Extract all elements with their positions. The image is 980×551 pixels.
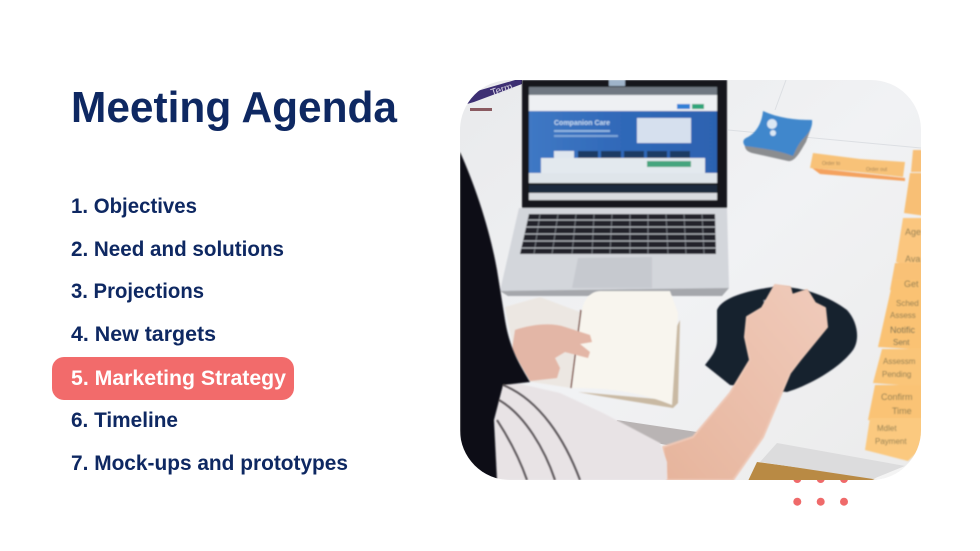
purple sticker: Term <box>490 82 514 99</box>
mouse pad <box>705 287 857 392</box>
slide canvas <box>52 80 921 506</box>
agenda item 3: 3. Projections <box>71 280 204 303</box>
vertical sticky notes column: Ava <box>905 254 920 264</box>
highlighted agenda item 5: 5. Marketing Strategy <box>71 367 286 390</box>
laptop <box>500 80 729 296</box>
photo: person working at a desk with laptop <box>460 78 925 481</box>
person's dark hair <box>460 152 580 480</box>
laptop base <box>500 208 729 296</box>
agenda item 1: 1. Objectives <box>71 195 197 218</box>
vertical sticky notes column: Pending <box>882 370 911 379</box>
keyboard <box>520 214 716 254</box>
trackpad <box>572 257 652 288</box>
vertical sticky notes column: Sent <box>893 338 910 347</box>
agenda list <box>52 195 348 475</box>
highlighted agenda item 5 <box>52 357 294 400</box>
vertical sticky notes column: Sched <box>896 299 919 308</box>
vertical sticky notes column: Mdlet <box>877 424 897 433</box>
decorative dot grid <box>793 475 848 506</box>
vertical sticky notes column: Time <box>892 406 912 416</box>
laptop screen bezel <box>522 80 727 208</box>
hand on notebook <box>512 324 592 381</box>
notebook <box>505 291 680 408</box>
website hero <box>529 111 717 183</box>
laptop: Companion Care <box>554 120 610 127</box>
vertical sticky notes column <box>865 150 925 461</box>
vertical sticky notes column: Get <box>904 279 919 289</box>
agenda item 6: 6. Timeline <box>71 409 178 432</box>
agenda item 2: 2. Need and solutions <box>71 238 284 261</box>
horizontal sticky notes <box>810 153 905 181</box>
vertical sticky notes column: Age <box>905 227 921 237</box>
purple sticker <box>467 80 522 111</box>
vertical sticky notes column: Payment <box>875 437 907 446</box>
arm and hand on mouse <box>663 285 827 480</box>
horizontal sticky notes: Order out <box>866 167 888 173</box>
desk surface <box>460 80 921 481</box>
horizontal sticky notes: Order to <box>822 161 841 167</box>
vertical sticky notes column: Confirm <box>881 392 913 402</box>
agenda item 4: 4. New targets <box>71 323 216 346</box>
person's white shirt <box>495 380 667 480</box>
browser chrome <box>528 94 718 112</box>
blue eraser <box>743 111 812 161</box>
vertical sticky notes column: Assess <box>890 311 916 320</box>
vertical sticky notes column: Assessm <box>883 357 916 366</box>
vertical sticky notes column: Notific <box>890 325 916 335</box>
agenda item 7: 7. Mock-ups and prototypes <box>71 452 348 475</box>
title: Meeting Agenda <box>71 83 398 132</box>
